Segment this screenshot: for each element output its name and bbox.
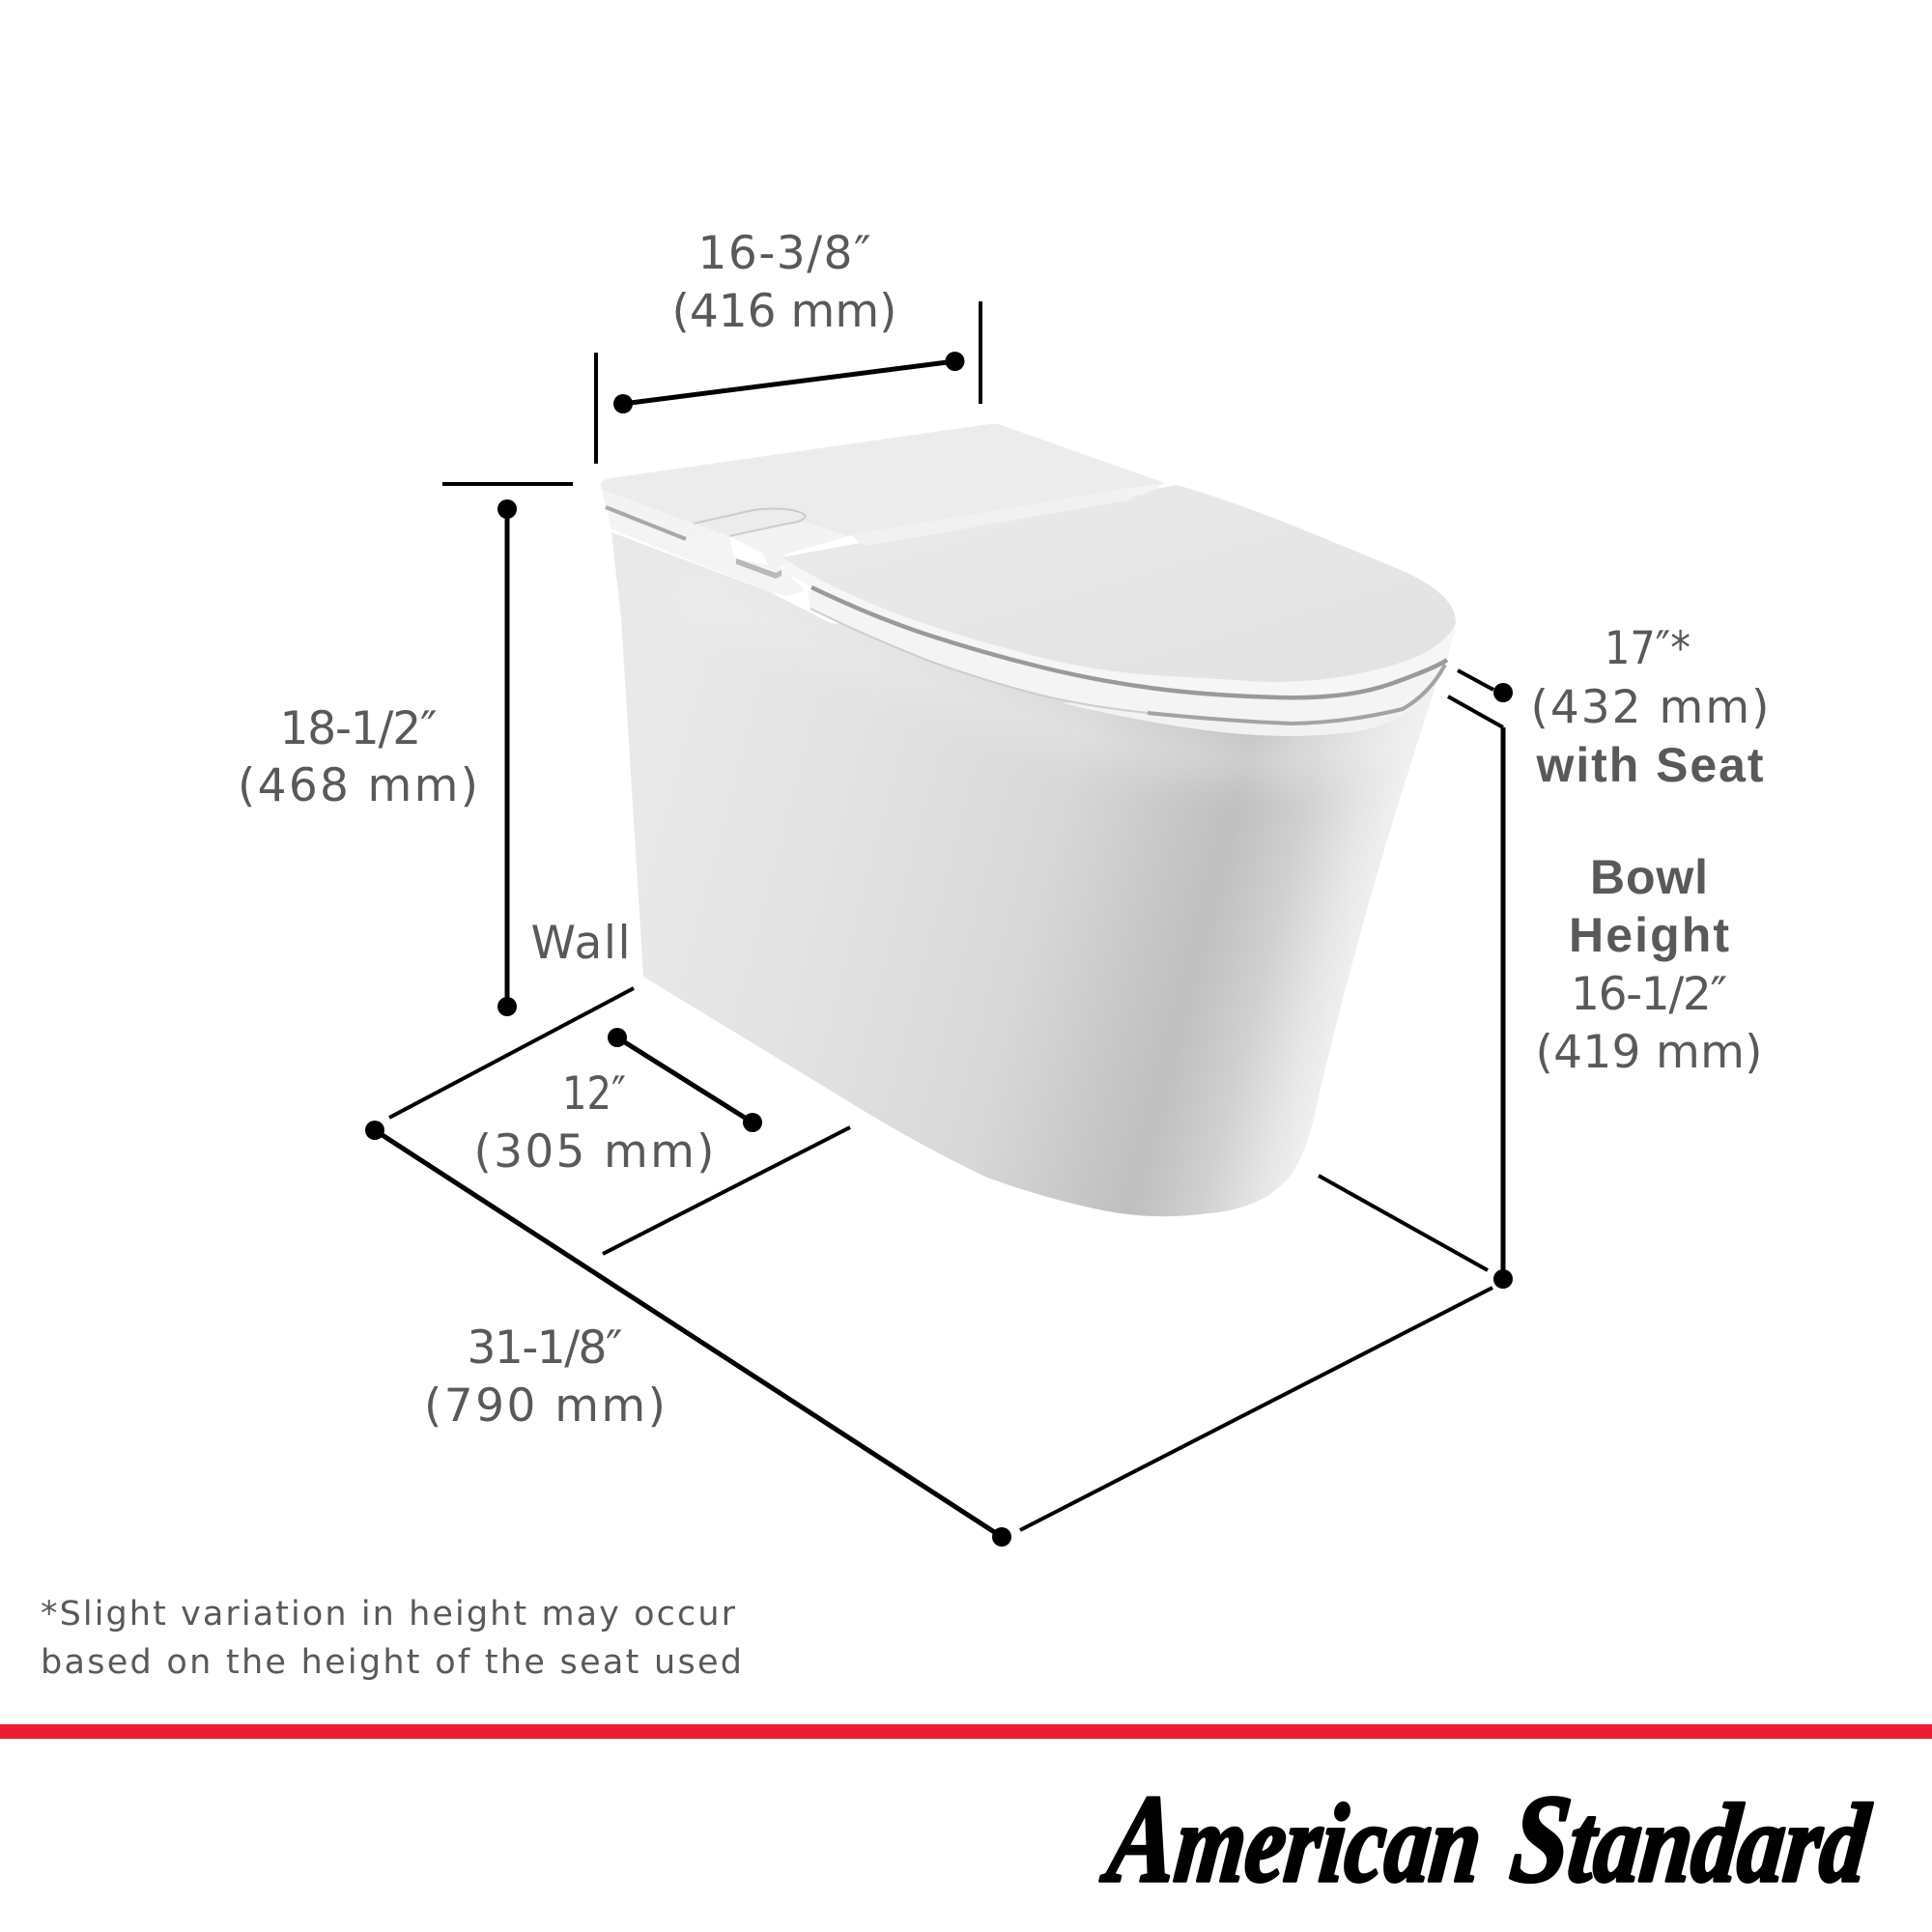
- dimension: depth 31-1/8 in: 31-1/8″: [468, 1321, 622, 1375]
- dimension: width 16-3/8 in: 16-3/8″: [697, 227, 871, 280]
- footnote: based on the height of the seat used: [41, 1643, 742, 1682]
- red divider bar: [0, 1724, 1932, 1739]
- dimension: width 16-3/8 in: [596, 227, 980, 464]
- dimension: height 17 in with seat, bowl height 16-1/2 in: (419 mm): [1536, 1026, 1762, 1079]
- dimension: height 17 in with seat, bowl height 16-1/2 in: Bowl: [1590, 850, 1708, 904]
- logo: American Standard: Standard: [1505, 1770, 1877, 1909]
- dimension: height 17 in with seat, bowl height 16-1/2 in: Height: [1569, 908, 1729, 962]
- dimension: depth 31-1/8 in: [365, 1121, 1492, 1547]
- footnote: [41, 1595, 742, 1682]
- dimension: rough-in 12 in: 12″: [562, 1067, 626, 1121]
- footnote: *Slight variation in height may occur: [41, 1595, 736, 1634]
- tank lid: [601, 424, 1165, 596]
- dimension: tank height 18-1/2 in: [238, 484, 573, 1016]
- toilet body: [611, 532, 1443, 1216]
- seat lid: [781, 483, 1456, 697]
- dimension: height 17 in with seat, bowl height 16-1/2 in: 17″*: [1605, 622, 1690, 675]
- logo: American Standard: American: [1096, 1770, 1489, 1909]
- dimension: width 16-3/8 in: (416 mm): [672, 285, 896, 338]
- toilet illustration: [601, 424, 1456, 1216]
- dimension: height 17 in with seat, bowl height 16-1/2 in: [1448, 622, 1770, 1289]
- dimension: rough-in 12 in: [389, 988, 850, 1254]
- dimension: rough-in 12 in: (305 mm): [473, 1125, 715, 1179]
- seat ring: [808, 580, 1447, 724]
- wall label: Wall: [531, 917, 630, 970]
- dimension: height 17 in with seat, bowl height 16-1/2 in: (432 mm): [1530, 681, 1770, 734]
- dimension: depth 31-1/8 in: (790 mm): [424, 1379, 666, 1433]
- dimension: tank height 18-1/2 in: (468 mm): [238, 759, 478, 812]
- logo: American Standard: [1096, 1770, 1877, 1909]
- dimension: tank height 18-1/2 in: 18-1/2″: [280, 702, 437, 755]
- dimension: height 17 in with seat, bowl height 16-1/2 in: 16-1/2″: [1571, 968, 1727, 1021]
- dimension: height 17 in with seat, bowl height 16-1/2 in: with Seat: [1536, 738, 1764, 792]
